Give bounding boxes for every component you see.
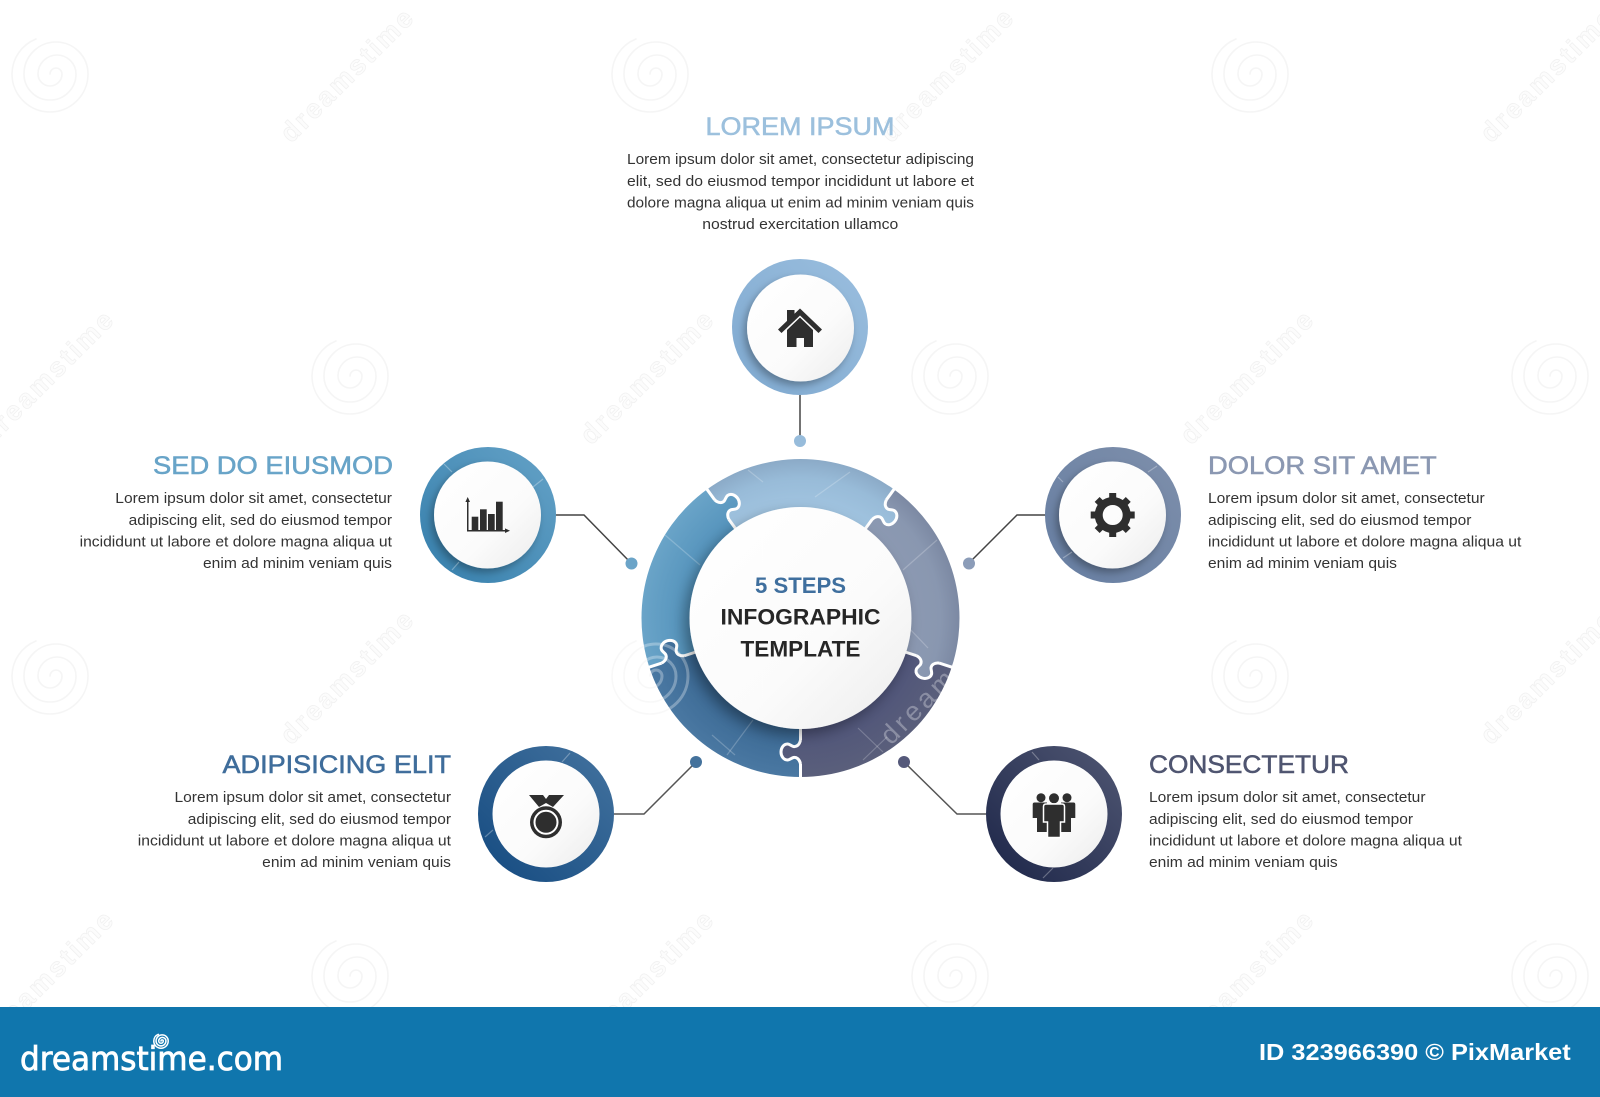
footer credit: ID 323966390 © PixMarket: [1259, 1039, 1571, 1065]
connector: left: [555, 515, 638, 570]
watermark overlay on ring: dreamstime: [874, 605, 1019, 750]
text block: left: [80, 490, 393, 572]
segment: bottom right: [776, 634, 970, 802]
text block: left: adipiscing elit, sed do eiusmod tempor: [129, 512, 392, 529]
connector: bottom left: [614, 756, 702, 814]
text block: bottom right: Lorem ipsum dolor sit amet, consectetur: [1149, 789, 1426, 806]
watermark overlay on ring: [612, 470, 1019, 760]
watermark background: dreamstime: [1174, 905, 1319, 1050]
center title: [720, 573, 881, 662]
node: bottom left with medal icon: [478, 746, 614, 882]
text block: bottom right: [1149, 789, 1463, 871]
puzzle joint: right to bottom right: [897, 649, 953, 686]
connector: top: [794, 395, 806, 447]
watermark background: dreamstime: [274, 3, 419, 148]
text block: bottom left: Lorem ipsum dolor sit amet, consectetur: [174, 789, 451, 806]
text block: right: adipiscing elit, sed do eiusmod tempor: [1208, 512, 1471, 529]
footer band: [0, 1007, 1600, 1097]
text block: bottom left: enim ad minim veniam quis: [262, 854, 451, 871]
text block: bottom right: enim ad minim veniam quis: [1149, 854, 1338, 871]
central white circle: [690, 507, 912, 729]
connector: right: [963, 515, 1046, 570]
icon: medal: [529, 795, 564, 838]
segment: left: [620, 480, 746, 680]
text block: left: enim ad minim veniam quis: [203, 555, 392, 572]
icon: gear: [1091, 493, 1135, 537]
text block: right: [1208, 490, 1522, 572]
node: bottom right with people icon: [986, 746, 1122, 882]
text block: left: Lorem ipsum dolor sit amet, consectetur: [115, 490, 392, 507]
connector: bottom right: [898, 756, 986, 814]
heading: lorem ipsum: LOREM IPSUM: [706, 113, 894, 141]
watermark background: dreamstime: [574, 905, 719, 1050]
node: top with home icon: [732, 259, 868, 395]
heading: sed do eiusmod: SED DO EIUSMOD: [153, 452, 393, 480]
puzzle joint: bottom left to left: [642, 633, 698, 669]
icon: people: [1033, 793, 1075, 838]
center title line: template: TEMPLATE: [740, 636, 860, 662]
segment: right: [855, 480, 981, 680]
icon: bar chart: [465, 497, 510, 533]
segment: bottom left: [631, 634, 825, 802]
icon: home: [778, 308, 822, 347]
puzzle joint: bottom right to bottom left: [781, 726, 802, 778]
text block: left: incididunt ut labore et dolore magna aliqua ut: [80, 534, 393, 550]
text block: top: [627, 151, 975, 233]
text block: bottom right: incididunt ut labore et dolore magna aliqua ut: [1149, 832, 1463, 850]
watermark ticks on nodes: [444, 464, 1157, 878]
text block: bottom left: [138, 789, 452, 871]
text block: top: dolore magna aliqua ut enim ad minim veniam quis: [627, 194, 974, 212]
heading: adipisicing elit: ADIPISICING ELIT: [222, 751, 451, 779]
watermark background: dreamstime: [874, 3, 1019, 148]
watermark background: dreamstime: [274, 605, 419, 750]
watermark background: dreamstime: [1174, 305, 1319, 450]
watermark background: dreamstime: [574, 305, 719, 450]
text block: bottom right: adipiscing elit, sed do eiusmod tempor: [1149, 811, 1413, 828]
node: left with chart icon: [420, 447, 556, 583]
text block: bottom left: incididunt ut labore et dolore magna aliqua ut: [138, 832, 452, 850]
heading: dolor sit amet: DOLOR SIT AMET: [1208, 452, 1437, 480]
segment: top: [707, 459, 894, 531]
puzzle joint: top to right: [862, 487, 910, 542]
center title line: infographic: INFOGRAPHIC: [720, 604, 881, 630]
heading: consectetur: CONSECTETUR: [1149, 751, 1349, 779]
text block: top: nostrud exercitation ullamco: [702, 216, 898, 233]
footer logo: dreamstime.com: [20, 1039, 283, 1078]
text block: top: Lorem ipsum dolor sit amet, consectetur adipiscing: [627, 151, 974, 168]
center title line: 5 steps: 5 STEPS: [755, 573, 846, 598]
node: right with gear icon: [1045, 447, 1181, 583]
text block: top: elit, sed do eiusmod tempor incididunt ut labore et: [627, 173, 975, 190]
central puzzle ring: [620, 459, 981, 802]
text block: right: Lorem ipsum dolor sit amet, consectetur: [1208, 490, 1485, 507]
text block: bottom left: adipiscing elit, sed do eiusmod tempor: [188, 811, 451, 828]
puzzle joint: left to top: [705, 477, 753, 532]
text block: right: enim ad minim veniam quis: [1208, 555, 1397, 572]
text block: right: incididunt ut labore et dolore magna aliqua ut: [1208, 534, 1522, 550]
